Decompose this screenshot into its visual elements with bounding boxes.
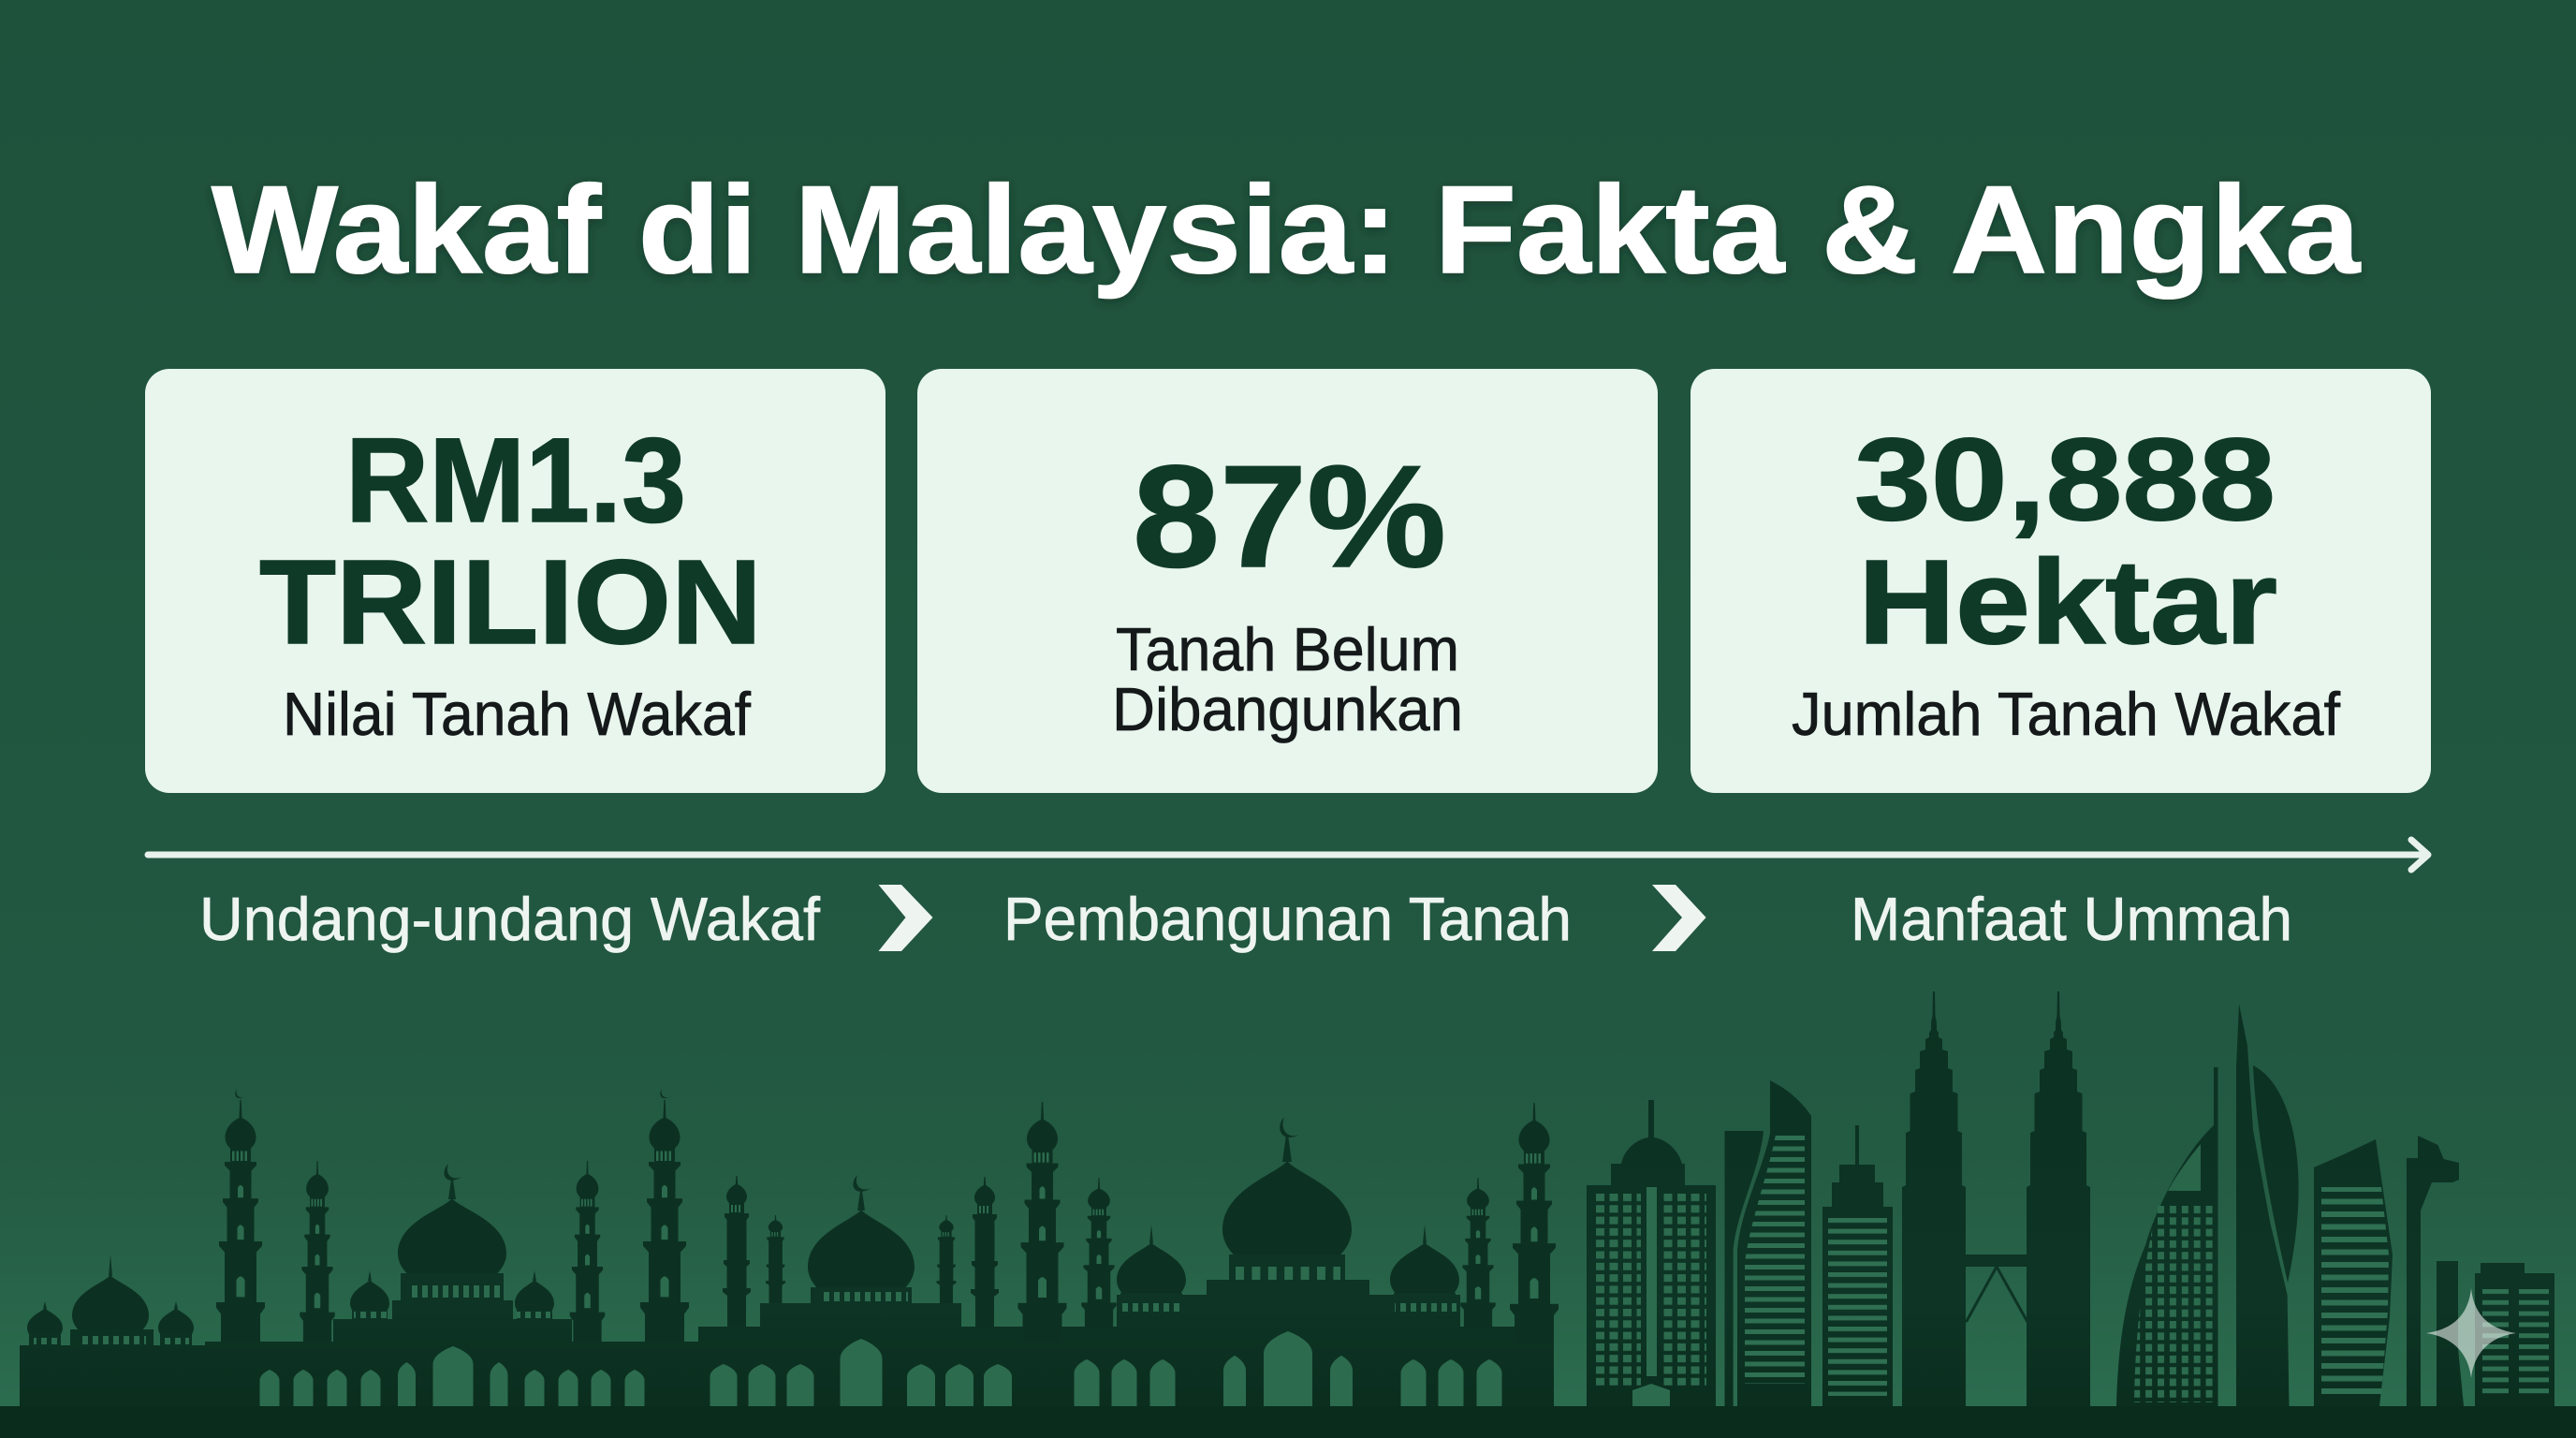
domes — [27, 1089, 1459, 1345]
title: Wakaf di Malaysia: Fakta & Angka — [212, 161, 2361, 300]
crescents — [235, 1089, 1299, 1192]
stat: 87%: 87% — [1133, 435, 1446, 597]
icon: chevron 1 — [878, 885, 932, 951]
stat: hektar: Hektar — [1858, 536, 2277, 669]
sail tower — [2236, 1004, 2299, 1406]
twin towers — [1902, 991, 2090, 1406]
stat: RM1.3: RM1.3 — [345, 414, 686, 548]
ground strip — [0, 1406, 2576, 1438]
hooked tower — [2407, 1136, 2459, 1406]
curved tower pair — [1724, 1080, 1811, 1406]
label: undang-undang wakaf: Undang-undang Wakaf — [199, 885, 821, 953]
drum windows — [34, 1267, 1456, 1344]
label: pembangunan tanah: Pembangunan Tanah — [1003, 885, 1572, 953]
panel: tanah belum dibangunkan — [917, 369, 1658, 793]
arched tower — [2116, 1067, 2218, 1406]
label: manfaat ummah: Manfaat Ummah — [1851, 885, 2292, 953]
skyline: city towers — [1587, 991, 2554, 1406]
caption: tanah belum: Tanah Belum — [1116, 615, 1459, 683]
domed office tower — [1587, 1100, 1716, 1406]
mosque base blocks — [20, 1280, 1554, 1406]
caption: jumlah tanah wakaf: Jumlah Tanah Wakaf — [1792, 680, 2341, 748]
panel: jumlah tanah wakaf — [1690, 369, 2431, 793]
stat: trilion: TRILION — [259, 536, 762, 669]
icon: sparkle — [2426, 1288, 2516, 1378]
minarets — [216, 1100, 265, 1342]
arches — [260, 1331, 1501, 1406]
skyline: mosques — [20, 1089, 1559, 1406]
caption: dibangunkan: Dibangunkan — [1112, 675, 1463, 743]
icon: chevron 2 — [1652, 885, 1706, 951]
stepped tower — [1822, 1125, 1893, 1406]
twisted tower — [2314, 1139, 2393, 1406]
slim tower — [2437, 1261, 2464, 1406]
low-rise tower — [2475, 1263, 2554, 1406]
arrow: timeline — [148, 840, 2428, 870]
caption: nilai tanah wakaf: Nilai Tanah Wakaf — [283, 680, 752, 748]
panel: nilai tanah wakaf — [145, 369, 886, 793]
stat: 30,888: 30,888 — [1854, 415, 2276, 545]
